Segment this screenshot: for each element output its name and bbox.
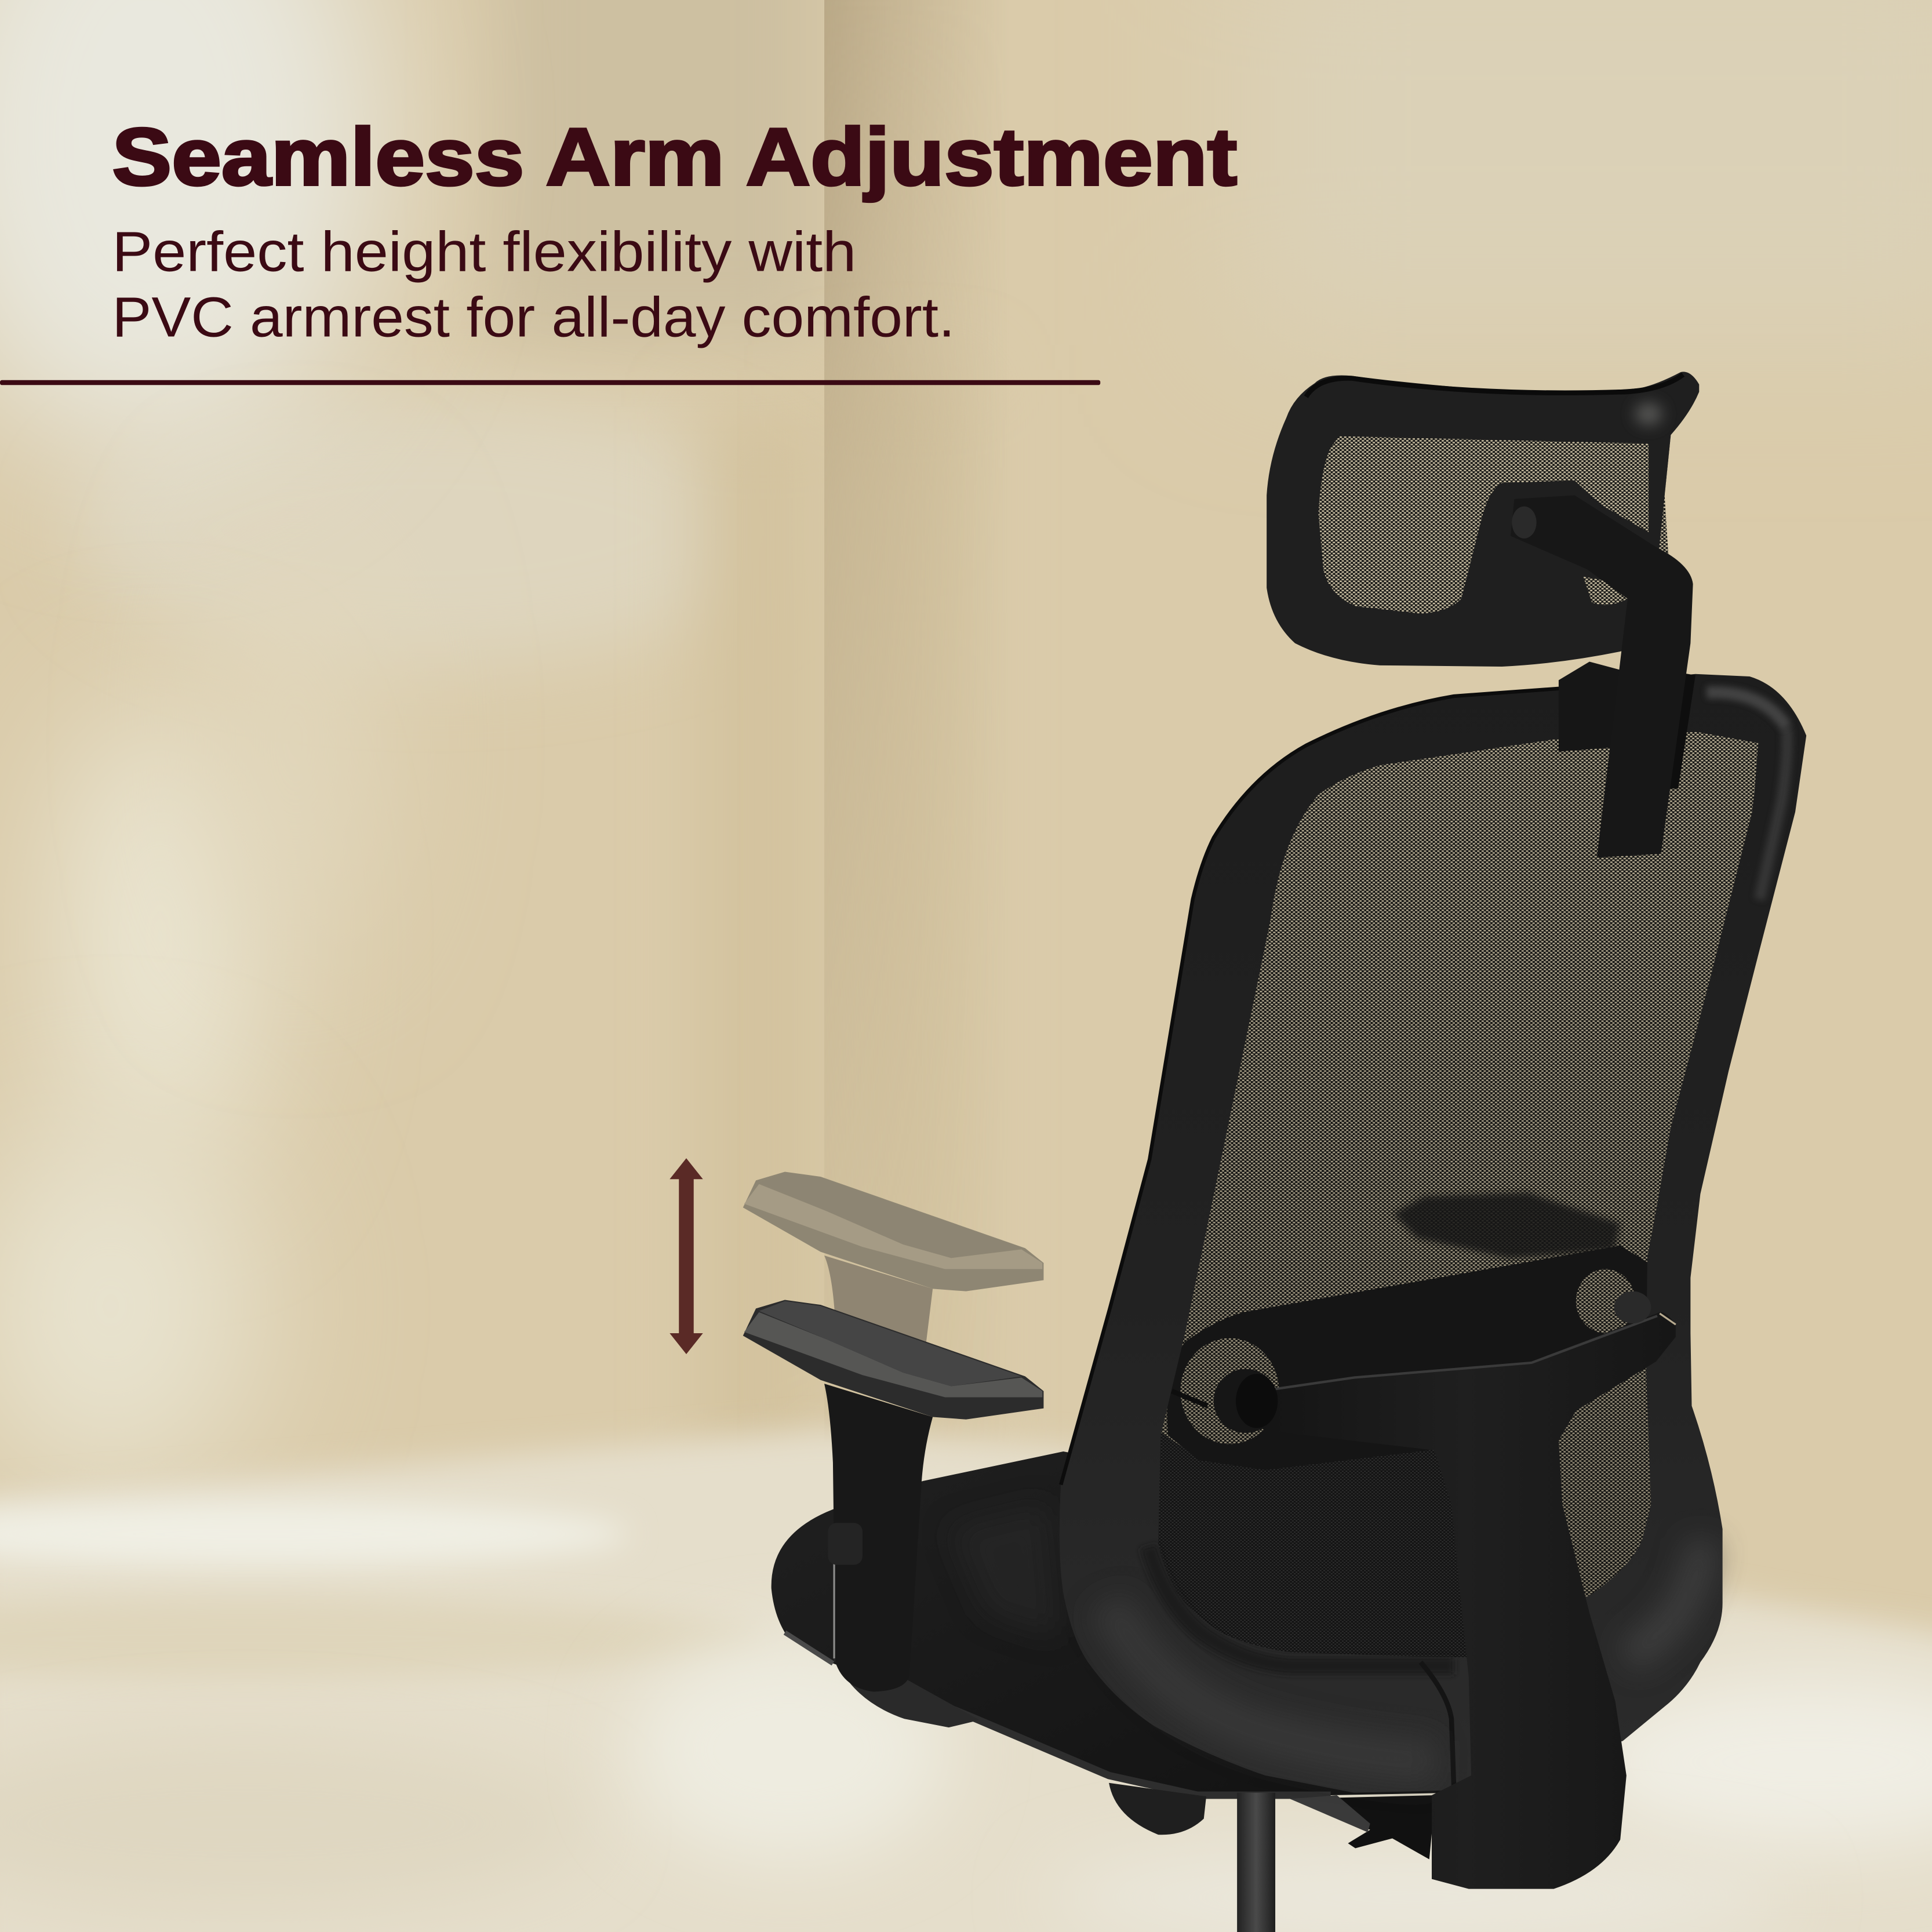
subtitle text block: PVC armrest for all-day comfort.: [112, 285, 955, 348]
shadow across backrest mesh: [1393, 1193, 1620, 1258]
backrest frame: [1060, 674, 1806, 1793]
ghost armrest: raised position: [743, 1171, 1043, 1349]
divider rule under heading: [0, 380, 1100, 385]
backrest mesh panel: [1156, 727, 1759, 1664]
chair seat cushion: [772, 1451, 1454, 1795]
seat base plate: [833, 1658, 980, 1727]
headrest with mesh: [1267, 372, 1699, 667]
headrest bracket: [1511, 496, 1695, 857]
side arm support: [1171, 1291, 1676, 1889]
subtitle text block: Perfect height flexibility with: [112, 220, 856, 283]
black armrest: lowered position: [743, 1300, 1043, 1692]
icon: up-down adjustment arrow: [670, 1158, 703, 1354]
chair column and base: [1109, 1783, 1435, 1932]
lower dark mesh panel: [1154, 1429, 1479, 1664]
lumbar support band: [1167, 1246, 1661, 1470]
title: Seamless Arm Adjustment: [112, 111, 1237, 202]
subtitle text block: [112, 220, 955, 348]
